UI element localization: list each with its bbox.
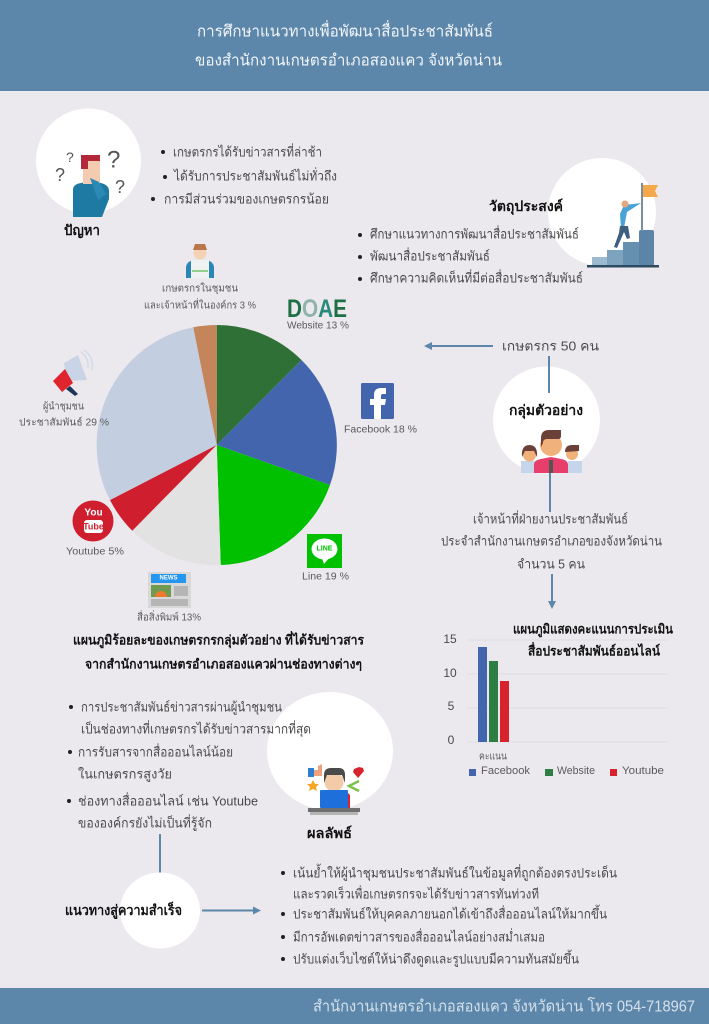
pie label: community leaders: ประชาสัมพันธ์ 29 %	[19, 416, 109, 428]
pie label: website	[287, 295, 349, 332]
results list: ในเกษตรกรสูงวัย	[78, 766, 172, 782]
objectives list	[358, 226, 583, 286]
title: การศึกษาแนวทางเพื่อพัฒนาสื่อประชาสัมพันธ์	[197, 20, 493, 40]
title: ของสำนักงานเกษตรอำเภอสองแคว จังหวัดน่าน	[195, 52, 502, 70]
heading: problem: ปัญหา	[64, 222, 100, 239]
chart legend: Youtube	[622, 765, 664, 777]
pie label: farmers and staff: และเจ้าหน้าที่ในองค์กร 3 %	[144, 298, 256, 312]
problem list: ได้รับการประชาสัมพันธ์ไม่ทั่วถึง	[173, 168, 337, 184]
pie label: farmers and staff	[144, 244, 256, 312]
pie label: website: Website 13 %	[287, 320, 349, 332]
bar chart: คะแนน	[479, 752, 507, 762]
chart title: แผนภูมิแสดงคะแนนการประเมิน	[513, 622, 673, 638]
icon: confused person: ?	[66, 149, 74, 165]
icon: farmer	[186, 244, 214, 278]
results list: ขององค์กรยังไม่เป็นที่รู้จัก	[78, 814, 212, 832]
pie label: community leaders: ผู้นำชุมชน	[43, 400, 84, 412]
results list: การประชาสัมพันธ์ข่าวสารผ่านผู้นำชุมชน	[81, 700, 282, 716]
pie label: youtube: Youtube 5%	[66, 546, 124, 558]
results list: ช่องทางสื่อออนไลน์ เช่น Youtube	[78, 792, 258, 808]
heading: pie chart caption: แผนภูมิร้อยละของเกษตรกรกลุ่มตัวอย่าง ที่ได้รับข่าวสาร	[73, 630, 364, 648]
footer banner	[0, 988, 709, 1024]
panel: objectives	[358, 158, 659, 286]
objectives list: พัฒนาสื่อประชาสัมพันธ์	[370, 248, 490, 264]
pie label: farmers and staff: เกษตรกรในชุมชน	[162, 282, 238, 294]
pie label: facebook	[344, 383, 417, 436]
icon: newspaper: NEWS	[160, 576, 178, 582]
recommendations list: เน้นย้ำให้ผู้นำชุมชนประชาสัมพันธ์ในข้อมูลที่ถูกต้องตรงประเด็น	[293, 864, 617, 882]
text: farmers sample: เกษตรกร 50 คน	[502, 338, 599, 354]
chart legend	[469, 765, 664, 777]
text: PR officers sample: ประจำสำนักงานเกษตรอำเภอของจังหวัดน่าน	[441, 534, 662, 548]
bar chart	[443, 622, 673, 777]
bar chart: 10	[443, 666, 457, 680]
pie label: facebook: Facebook 18 %	[344, 424, 417, 436]
recommendations list: และรวดเร็วเพื่อเกษตรกรจะได้รับข่าวสารทันท่วงที	[293, 884, 539, 902]
chart title: สื่อประชาสัมพันธ์ออนไลน์	[528, 642, 660, 658]
pie label: youtube	[66, 500, 124, 558]
arrow: to recommendations	[202, 906, 261, 914]
heading: objectives: วัตถุประสงค์	[489, 198, 563, 215]
arrow: to bar chart	[548, 574, 556, 609]
icon: DOAE logo: DOAE	[287, 295, 347, 323]
panel: results	[67, 692, 393, 841]
heading: results: ผลลัพธ์	[307, 825, 352, 841]
pie label: print media	[137, 572, 201, 624]
heading: pie chart caption: จากสำนักงานเกษตรอำเภอสองแควผ่านช่องทางต่างๆ	[85, 656, 362, 672]
icon: youtube: Tube	[83, 522, 104, 532]
results list	[67, 700, 311, 832]
recommendations list	[281, 864, 617, 968]
panel: problem	[36, 108, 337, 239]
icon: youtube	[72, 500, 114, 542]
text: PR officers sample	[441, 510, 662, 572]
bar chart: 0	[448, 733, 455, 747]
results list: เป็นช่องทางที่เกษตรกรได้รับข่าวสารมากที่สุด	[81, 720, 311, 738]
pie label: line	[302, 534, 349, 582]
icon: youtube: You	[84, 508, 103, 518]
icon: confused person	[55, 146, 125, 217]
problem list: การมีส่วนร่วมของเกษตรกรน้อย	[164, 192, 329, 206]
icon: confused person: ?	[55, 165, 65, 185]
icon: person at laptop	[307, 764, 364, 815]
chart legend: Website	[557, 765, 595, 777]
pie label: line: Line 19 %	[302, 572, 349, 582]
results list: การรับสารจากสื่อออนไลน์น้อย	[78, 744, 233, 760]
icon: confused person: ?	[107, 146, 120, 174]
text: PR officers sample: จำนวน 5 คน	[517, 556, 585, 572]
arrow: to pie chart	[424, 342, 493, 350]
recommendations list: ประชาสัมพันธ์ให้บุคคลภายนอกได้เข้าถึงสื่อออนไลน์ให้มากขึ้น	[293, 904, 607, 922]
panel: sample group	[424, 338, 662, 609]
icon: megaphone	[53, 350, 92, 396]
icon: line: LINE	[317, 546, 333, 552]
bar chart: 15	[443, 632, 457, 646]
heading: path to success: แนวทางสู่ความสำเร็จ	[65, 901, 182, 919]
problem list: เกษตรกรได้รับข่าวสารที่ล่าช้า	[173, 144, 322, 160]
text: PR officers sample: เจ้าหน้าที่ฝ่ายงานประชาสัมพันธ์	[473, 510, 628, 526]
heading: sample group: กลุ่มตัวอย่าง	[509, 402, 583, 419]
icon: climbing steps with flag	[587, 183, 659, 268]
pie label: community leaders	[19, 350, 109, 428]
bar chart: 5	[448, 699, 455, 713]
pie label: print media: สื่อสิ่งพิมพ์ 13%	[137, 610, 201, 624]
objectives list: ศึกษาความคิดเห็นที่มีต่อสื่อประชาสัมพันธ์	[370, 268, 583, 286]
title	[195, 20, 502, 70]
icon: people	[521, 430, 582, 473]
icon: facebook	[361, 383, 394, 419]
problem list	[151, 144, 337, 206]
recommendations list: มีการอัพเดตข่าวสารของสื่อออนไลน์อย่างสม่ำเสมอ	[293, 928, 545, 944]
icon: confused person: ?	[115, 177, 125, 197]
heading: pie chart caption	[73, 630, 364, 672]
panel: path to success	[65, 834, 617, 968]
header banner	[0, 0, 709, 91]
recommendations list: ปรับแต่งเว็บไซต์ให้น่าดึงดูดและรูปแบบมีความทันสมัยขึ้น	[293, 950, 579, 968]
pie chart	[97, 325, 337, 565]
chart legend: Facebook	[481, 765, 531, 777]
objectives list: ศึกษาแนวทางการพัฒนาสื่อประชาสัมพันธ์	[370, 226, 579, 242]
chart title	[513, 622, 673, 658]
